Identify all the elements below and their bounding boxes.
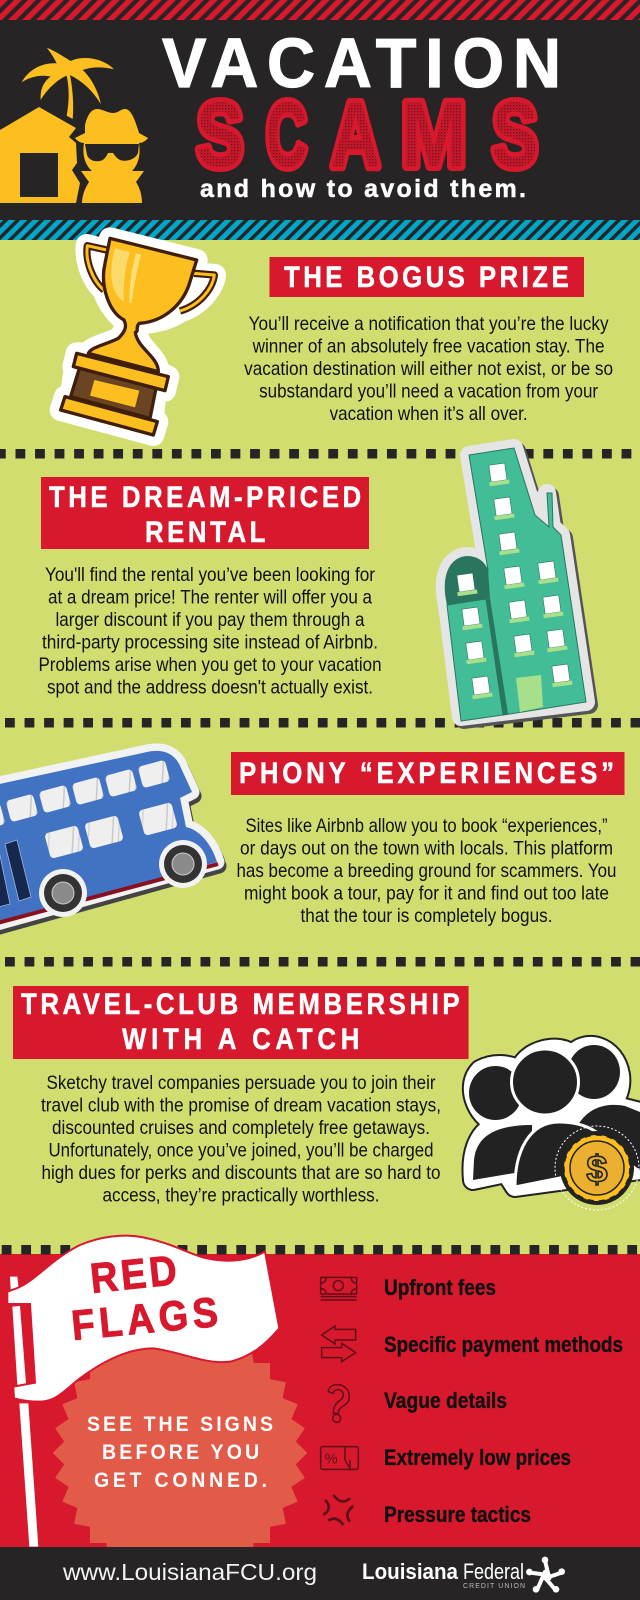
logo wordmark: Federal	[463, 1559, 524, 1584]
dotted divider row 1	[0, 449, 640, 458]
icon: pressure mark	[323, 1495, 353, 1525]
dotted divider row 2	[0, 718, 640, 728]
bus shadow	[0, 755, 219, 929]
icon: money	[321, 1277, 357, 1300]
windows	[457, 463, 570, 695]
sunglasses	[85, 144, 139, 161]
header banner	[0, 0, 640, 240]
speckled texture: A	[331, 84, 380, 186]
people white edge	[472, 1046, 640, 1187]
logo wordmark: CREDIT UNION	[463, 1583, 525, 1590]
heading box: TRAVEL-CLUB MEMBERSHIP	[21, 987, 460, 1020]
solid letter bodies: S	[492, 84, 538, 186]
coin	[555, 1126, 639, 1210]
upper base plate	[73, 353, 168, 391]
lower windows	[44, 802, 178, 859]
label: Upfront fees	[384, 1275, 496, 1300]
label: Extremely low prices	[384, 1445, 571, 1470]
cup	[88, 238, 197, 372]
body text: substandard you’ll need a vacation from your	[259, 380, 599, 402]
body text: access, they’re practically worthless.	[102, 1184, 380, 1206]
body text: that the tour is completely bogus.	[300, 905, 552, 927]
icon: discount ticket: %	[325, 1451, 338, 1467]
speckled texture	[196, 84, 538, 186]
name plate	[90, 380, 139, 407]
speckled texture: S	[196, 84, 244, 186]
heading box	[13, 986, 469, 1059]
flag text: FLAGS	[69, 1289, 220, 1349]
bus stripe	[0, 864, 218, 925]
body text: Unfortunately, once you’ve joined, you’ll be charged	[48, 1140, 434, 1162]
icon: palm tree	[22, 48, 114, 119]
body text: Sketchy travel companies persuade you to join their	[46, 1072, 436, 1094]
people outer outline	[472, 1046, 640, 1187]
dome	[445, 556, 490, 605]
left and right figures	[469, 1045, 640, 1180]
dotted divider row 4	[0, 1245, 640, 1254]
title: VACATION: VACATION	[162, 24, 561, 102]
body text: at a dream price! The renter will offer you a	[48, 586, 372, 608]
badge text: SEE THE SIGNS	[87, 1413, 273, 1436]
logo wordmark: Louisiana	[362, 1559, 459, 1584]
body text: You'll find the rental you’ve been looking for	[45, 564, 375, 586]
icon: arrows	[322, 1326, 356, 1362]
icon: discount ticket	[321, 1447, 358, 1469]
door	[0, 840, 31, 908]
heading box: WITH A CATCH	[122, 1022, 359, 1055]
house door	[20, 153, 58, 197]
badge text	[87, 1413, 273, 1492]
panel: red flags	[0, 1236, 640, 1580]
website: www.LouisianaFCU.org	[62, 1559, 317, 1585]
footer	[0, 1547, 640, 1600]
title: SCAMS	[196, 84, 538, 186]
heading box	[41, 477, 369, 549]
centre figure	[512, 1049, 620, 1187]
solid letter bodies: A	[331, 84, 380, 186]
solid letter bodies: C	[266, 84, 307, 186]
building sticker edge	[445, 448, 586, 717]
body text	[41, 1072, 441, 1206]
brown base	[71, 368, 156, 418]
icon: question mark	[328, 1385, 349, 1422]
badge text: GET CONNED.	[94, 1469, 267, 1492]
icon: house	[0, 107, 80, 203]
speckled texture: C	[266, 84, 307, 186]
dark side band	[486, 598, 508, 715]
body text	[38, 564, 382, 698]
upper windows	[0, 760, 170, 831]
speckled texture: M	[401, 84, 467, 186]
flag text: RED	[88, 1247, 179, 1302]
solid letter bodies: S	[196, 84, 244, 186]
body text: spot and the address doesn't actually exist.	[47, 676, 373, 698]
body text: travel club with the promise of dream vacation stays,	[41, 1094, 441, 1116]
right handle	[180, 273, 214, 311]
label: Pressure tactics	[384, 1502, 531, 1527]
lower base plate	[61, 397, 157, 435]
rear wheel	[39, 869, 87, 917]
dotted divider row 3	[0, 957, 640, 966]
heading box: RENTAL	[145, 515, 265, 548]
body text: vacation when it’s all over.	[330, 403, 528, 425]
building shadow	[448, 451, 589, 720]
tower	[469, 448, 586, 715]
solid letter bodies: M	[401, 84, 467, 186]
front wheel	[159, 840, 207, 888]
panel: the bogus prize	[61, 238, 613, 435]
icon: double-decker bus	[0, 751, 219, 929]
icon: spy with hat and sunglasses	[75, 109, 148, 203]
left handle	[87, 246, 107, 290]
annex	[447, 599, 503, 721]
bus sticker edge	[0, 751, 217, 925]
body text: larger discount if you pay them through a	[56, 609, 365, 631]
blue striped band	[0, 220, 640, 240]
body text: high dues for perks and discounts that are so hard to	[42, 1162, 441, 1184]
badge text: BEFORE YOU	[102, 1441, 259, 1464]
body text: third-party processing site instead of Airbnb.	[42, 632, 378, 654]
icon: trophy	[61, 238, 215, 435]
list of warning signs	[321, 1275, 623, 1527]
cup shine stripe	[129, 253, 141, 303]
heading box: THE DREAM-PRICED	[49, 480, 361, 513]
coin: $	[586, 1149, 608, 1191]
icon: white flag	[7, 1236, 279, 1547]
body text: Problems arise when you get to your vacation	[38, 654, 382, 676]
door	[516, 675, 543, 712]
panel: phony experiences	[0, 751, 625, 929]
seal badge	[53, 1326, 307, 1580]
window sills	[457, 480, 573, 699]
logo wordmark	[362, 1559, 525, 1590]
label: Vague details	[384, 1388, 507, 1413]
cup shine	[111, 248, 130, 302]
body text: discounted cruises and completely free getaways.	[52, 1117, 430, 1139]
speckled texture: S	[492, 84, 538, 186]
solid letter bodies	[196, 84, 538, 186]
body text	[236, 815, 616, 927]
bus body	[0, 751, 217, 925]
red striped band	[0, 0, 640, 20]
icon: building	[445, 448, 589, 721]
body text	[244, 313, 613, 425]
logo mark	[528, 1559, 563, 1591]
flag text	[69, 1247, 220, 1349]
icon: group of people with coin	[469, 1045, 640, 1210]
heading box: THE BOGUS PRIZE	[284, 260, 569, 293]
subtitle: and how to avoid them.	[200, 175, 526, 203]
panel: the dream-priced rental	[38, 448, 589, 721]
heading box: PHONY “EXPERIENCES”	[239, 756, 614, 789]
panel: travel-club membership	[13, 986, 640, 1210]
